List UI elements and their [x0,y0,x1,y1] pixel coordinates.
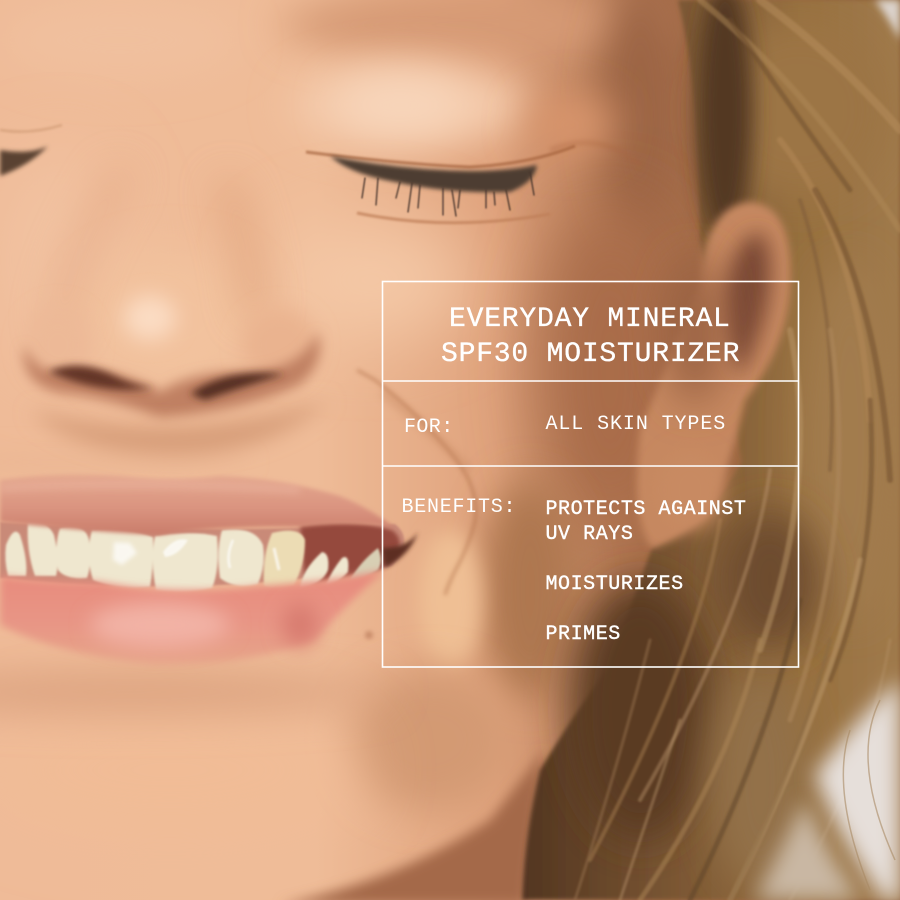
title: SPF30 MOISTURIZER [441,339,740,370]
benefits list: PROTECTS AGAINST [546,498,746,521]
cheek fold [357,370,476,595]
title: EVERYDAY MINERAL [449,304,731,335]
nose [24,170,330,454]
title [441,304,740,370]
eyelid [335,77,465,133]
benefits list: MOISTURIZES [546,573,684,596]
nose underside shadow [24,332,319,418]
lower lip [0,570,385,664]
teeth [5,521,381,592]
skin tonal shading [0,0,680,830]
benefits list: UV RAYS [546,523,633,546]
label: for: FOR: [404,416,454,439]
panel frame [382,282,798,667]
hair strands [575,0,900,900]
closed eye left [0,125,62,176]
hair [522,0,900,900]
closed eye right [306,77,640,223]
tooth highlights [113,539,279,570]
label: benefits: BENEFITS: [402,496,516,519]
mouth interior [0,522,404,587]
mouth [0,475,418,664]
eyelashes [330,156,537,216]
mouth corner [382,532,418,568]
benefits list [546,498,746,646]
skin specks [365,631,373,639]
background highlights [755,0,900,900]
ear [637,202,790,548]
value: skin types: ALL SKIN TYPES [546,413,726,436]
nose wings [242,309,318,381]
neck [280,750,545,900]
benefits list: PRIMES [546,623,621,646]
upper lip [0,475,395,535]
info panel [382,282,798,667]
